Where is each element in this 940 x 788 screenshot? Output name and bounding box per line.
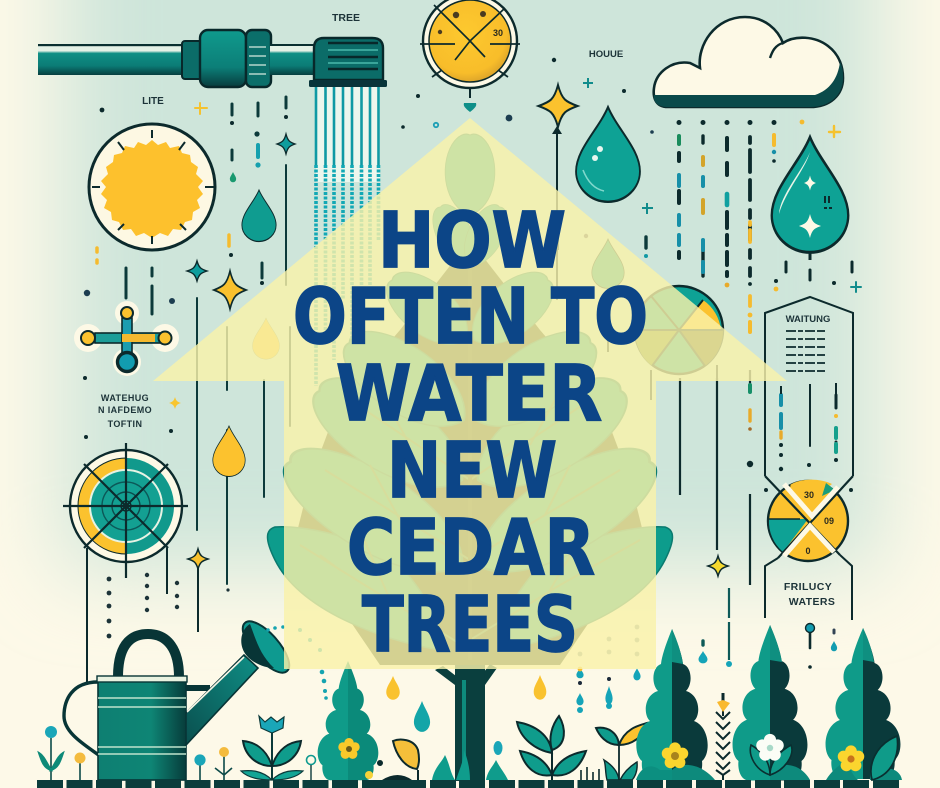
icon: cloud bbox=[654, 17, 843, 107]
icon: top dial gauge bbox=[420, 0, 520, 112]
label: watering info: TOFTIN bbox=[108, 419, 142, 429]
title: HOW bbox=[378, 197, 566, 286]
icon: faint stems under overlay bbox=[558, 236, 608, 352]
icon: faint drop under overlay bbox=[252, 318, 280, 359]
dots near target bbox=[84, 429, 173, 439]
icon: teal sparkle two bbox=[187, 261, 207, 281]
icon: frequency pie chart: 09 bbox=[824, 516, 834, 526]
title: OFTEN TO bbox=[293, 273, 648, 362]
title bbox=[293, 197, 648, 670]
icon: frequency pie chart bbox=[765, 476, 853, 620]
icon: hose pipe and nozzle bbox=[38, 30, 387, 87]
small pins above trees bbox=[698, 624, 837, 669]
schedule lower ticks bbox=[781, 383, 836, 394]
icon: small green drop bbox=[230, 172, 236, 182]
icon: diamond sparkle right bbox=[708, 556, 728, 576]
small cedar bbox=[318, 661, 378, 780]
icon: valve cross bbox=[74, 301, 179, 376]
label: LITE: LITE bbox=[142, 96, 164, 107]
icon: watering can bbox=[64, 614, 297, 780]
small plants center left bbox=[306, 740, 470, 780]
panel: watering schedule chart bbox=[765, 297, 853, 476]
ground blocks bbox=[37, 780, 899, 788]
plants left of can bbox=[39, 726, 232, 780]
title: TREES bbox=[362, 581, 578, 670]
trunk of central tree bbox=[435, 664, 497, 781]
cedar tree three bbox=[826, 628, 902, 780]
schedule rows bbox=[786, 331, 832, 371]
decorative dashes and dots, upper left bbox=[83, 94, 438, 584]
title: NEW bbox=[387, 427, 557, 516]
icon: teal sparkle bbox=[277, 134, 295, 154]
arrow chevrons between trees bbox=[716, 693, 730, 780]
icon: sparkle gold small bbox=[169, 397, 181, 409]
label: watering info: WATEHUG bbox=[101, 393, 149, 403]
water streams from nozzle bbox=[316, 87, 380, 386]
label: WAITUNG: WAITUNG bbox=[786, 314, 830, 325]
icon: pie chart under overlay bbox=[635, 286, 723, 400]
icon: yellow drop bbox=[213, 426, 245, 476]
plants right of trunk bbox=[486, 716, 647, 780]
icon: frequency pie chart: 30 bbox=[804, 490, 814, 500]
icon: large teal drop with sparkles bbox=[772, 137, 848, 260]
title: CEDAR bbox=[347, 504, 595, 593]
rain columns under cloud bbox=[676, 120, 861, 332]
icon: small teal drop bbox=[242, 190, 276, 242]
big cedar leaves behind the house bbox=[268, 134, 672, 665]
icon: target chart bbox=[63, 443, 188, 578]
label: watering info: N IAFDEMO bbox=[98, 405, 152, 415]
plant: tulip bbox=[241, 716, 303, 780]
icon: frequency pie chart: 0 bbox=[805, 546, 811, 556]
icon: teal water drop center bbox=[576, 107, 640, 202]
icon: diamond sparkle bbox=[188, 549, 208, 569]
label: HOUUE: HOUUE bbox=[589, 49, 623, 60]
title: WATER bbox=[336, 350, 602, 439]
floating drops bbox=[386, 675, 546, 732]
small marks near drops bbox=[506, 58, 654, 258]
label: watering info bbox=[98, 393, 152, 429]
spray dots from can bbox=[266, 625, 328, 700]
icon: sun dial bbox=[89, 124, 215, 250]
target hanging lines and dots bbox=[87, 548, 230, 685]
label: frequency waters: WATERS bbox=[789, 596, 835, 608]
icon: gold star with stem bbox=[538, 85, 578, 300]
long lines right of house bbox=[680, 370, 750, 660]
cedar tree two bbox=[733, 625, 810, 781]
icon: faint drop two under overlay bbox=[592, 239, 624, 288]
translucent yellow house overlay bbox=[153, 118, 787, 669]
icon: gold sparkle bbox=[214, 271, 246, 309]
dashes above pie bbox=[747, 385, 853, 492]
icon: top dial gauge: 30 bbox=[493, 28, 503, 38]
label: TREE: TREE bbox=[332, 12, 360, 24]
label: frequency waters bbox=[784, 581, 835, 608]
label: frequency waters: FRILUCY bbox=[784, 581, 832, 593]
cedar tree one bbox=[636, 629, 715, 780]
dotted drips right of trunk bbox=[576, 625, 641, 713]
